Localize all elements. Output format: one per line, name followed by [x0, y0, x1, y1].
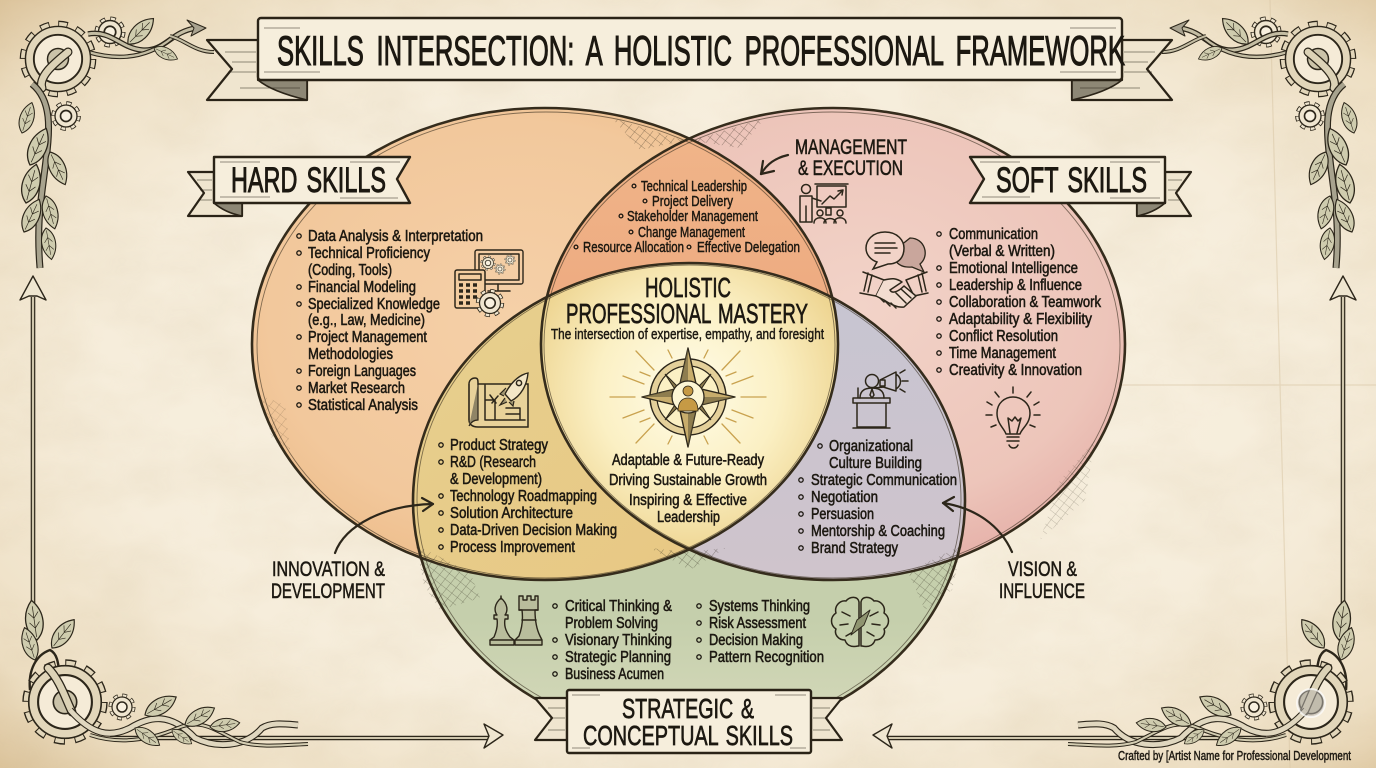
list: hard skills: Market Research — [308, 380, 405, 397]
list: vision and influence: Organizational — [829, 438, 913, 455]
label: innovation and development: DEVELOPMENT — [271, 580, 385, 603]
arrow: bottom right border tip — [873, 724, 892, 748]
list: strategic skills column two — [697, 598, 824, 666]
list: management and execution: Stakeholder Management — [627, 209, 758, 225]
list: management and execution — [574, 179, 800, 256]
list: strategic skills column one — [553, 598, 673, 683]
list: innovation and development: Process Improvement — [450, 539, 576, 556]
title banner — [207, 18, 1172, 100]
list: hard skills: Statistical Analysis — [308, 397, 418, 414]
list: vision and influence: Persuasion — [811, 506, 874, 523]
list: hard skills — [297, 228, 483, 414]
list: innovation and development — [439, 437, 617, 556]
arrow: management to overlap — [761, 155, 788, 174]
tagline: The intersection of expertise, empathy, and foresight — [551, 327, 824, 343]
list: soft skills: Time Management — [949, 345, 1057, 362]
list: vision and influence: Mentorship & Coaching — [811, 523, 945, 540]
list: strategic skills column one: Critical Thinking & — [565, 598, 673, 615]
arrow: vision to overlap — [943, 497, 1012, 552]
icon: brain with compass needle — [832, 597, 888, 647]
crosshatching at circle junctions — [260, 118, 1095, 610]
heading: holistic professional mastery: HOLISTIC — [645, 272, 731, 303]
list: strategic skills column two: Risk Assessment — [709, 615, 807, 632]
list: soft skills: Conflict Resolution — [949, 328, 1058, 345]
icon: lightbulb — [986, 387, 1040, 448]
icon: podium speaker with megaphone — [853, 370, 908, 428]
decorative corner frame, left — [15, 13, 490, 751]
list: innovation and development: Solution Architecture — [450, 505, 573, 522]
heading: hard skills: HARD SKILLS — [231, 161, 386, 200]
text: mastery outcomes — [609, 452, 767, 526]
list: soft skills: Emotional Intelligence — [949, 260, 1078, 277]
label: vision and influence: INFLUENCE — [999, 580, 1085, 603]
list: strategic skills column two: Pattern Recognition — [709, 649, 824, 666]
circle: strategic skills fill — [413, 263, 965, 739]
glass highlight on bottom right gear — [1297, 689, 1325, 717]
text: mastery outcomes: Driving Sustainable Growth — [609, 472, 767, 489]
list: strategic skills column one: Business Acumen — [565, 666, 664, 683]
arrow: innovation to overlap — [335, 498, 433, 553]
list: innovation and development: R&D (Research — [450, 454, 536, 471]
list: management and execution: Resource Allocation — [583, 240, 684, 256]
list: hard skills: Financial Modeling — [308, 279, 416, 296]
list: hard skills: Methodologies — [308, 346, 393, 363]
heading: holistic professional mastery — [551, 272, 824, 343]
arrow: bottom left border tip — [484, 724, 503, 748]
heading: strategic and conceptual skills — [583, 693, 793, 751]
list: strategic skills column one: Problem Solving — [565, 615, 658, 632]
icon: handshake — [860, 272, 928, 308]
venn diagram — [252, 108, 1125, 739]
list: hard skills: Specialized Knowledge — [308, 296, 440, 313]
list: vision and influence: Strategic Communication — [811, 472, 957, 489]
list: strategic skills column two: Systems Thinking — [709, 598, 810, 615]
list: soft skills: Leadership & Influence — [949, 277, 1082, 294]
list: vision and influence — [799, 438, 957, 557]
list: strategic skills column one: Visionary Thinking — [565, 632, 672, 649]
icon: compass with person — [610, 348, 766, 447]
icon: presenter with chart — [800, 184, 848, 223]
text: mastery outcomes: Leadership — [657, 509, 720, 526]
label: innovation and development: INNOVATION & — [272, 558, 385, 581]
label: innovation and development — [271, 558, 385, 603]
list: hard skills: Project Management — [308, 329, 428, 346]
list: soft skills — [937, 226, 1101, 379]
circle: hard skills fill — [252, 108, 838, 580]
heading: holistic professional mastery: PROFESSIONAL MASTERY — [566, 298, 808, 329]
list: hard skills: (e.g., Law, Medicine) — [308, 312, 425, 329]
list: hard skills: Data Analysis & Interpretation — [308, 228, 483, 245]
heading: soft skills: SOFT SKILLS — [996, 161, 1147, 200]
label: management and execution — [795, 136, 907, 180]
label: management and execution: MANAGEMENT — [795, 136, 907, 159]
list: innovation and development: Technology Roadmapping — [450, 488, 597, 505]
list: innovation and development: Data-Driven Decision Making — [450, 522, 617, 539]
region: central mastery — [542, 264, 837, 548]
banner: strategic and conceptual skills — [535, 690, 842, 753]
icon: blueprint and rocket — [469, 373, 528, 427]
list: soft skills: Collaboration & Teamwork — [949, 294, 1101, 311]
list: hard skills: Technical Proficiency — [308, 245, 430, 262]
list: soft skills: Communication — [949, 226, 1038, 243]
list: hard skills: Foreign Languages — [308, 363, 416, 380]
heading: strategic and conceptual skills: CONCEPTUAL SKILLS — [583, 720, 793, 751]
icon: chess pieces — [490, 596, 542, 645]
list: innovation and development: & Development) — [450, 471, 542, 488]
label: vision and influence — [999, 558, 1085, 603]
circle outlines — [252, 108, 1125, 739]
list: vision and influence: Brand Strategy — [811, 540, 898, 557]
list: management and execution: Project Delivery — [652, 194, 734, 210]
heading: strategic and conceptual skills: STRATEGIC & — [622, 693, 754, 724]
list: vision and influence: Culture Building — [829, 455, 922, 472]
list: strategic skills column one: Strategic Planning — [565, 649, 671, 666]
list: soft skills: Adaptability & Flexibility — [949, 311, 1092, 328]
region: hard and soft overlap — [549, 140, 830, 295]
list: soft skills: (Verbal & Written) — [949, 243, 1055, 260]
decorative corner frame, right — [886, 13, 1361, 751]
banner: hard skills — [188, 157, 410, 216]
list: soft skills: Creativity & Innovation — [949, 362, 1082, 379]
glow rays — [610, 350, 766, 444]
list: management and execution: Effective Delegation — [697, 240, 800, 256]
banner: soft skills — [970, 157, 1191, 216]
list: management and execution: Technical Leadership — [641, 179, 747, 195]
text: mastery outcomes: Adaptable & Future-Ready — [612, 452, 764, 469]
label: management and execution: & EXECUTION — [798, 157, 903, 180]
text: mastery outcomes: Inspiring & Effective — [629, 492, 747, 509]
icon: calculator, monitor and gear — [455, 250, 523, 314]
list: innovation and development: Product Strategy — [450, 437, 548, 454]
region: hard and strategic overlap — [414, 300, 686, 579]
list: management and execution: Change Management — [638, 225, 745, 241]
label: vision and influence: VISION & — [1008, 558, 1077, 581]
icon: speech bubbles — [866, 232, 925, 272]
list: hard skills: (Coding, Tools) — [308, 262, 392, 279]
region: soft and strategic overlap — [693, 300, 964, 579]
list: vision and influence: Negotiation — [811, 489, 878, 506]
list: strategic skills column two: Decision Making — [709, 632, 803, 649]
circle: soft skills fill — [541, 108, 1125, 580]
